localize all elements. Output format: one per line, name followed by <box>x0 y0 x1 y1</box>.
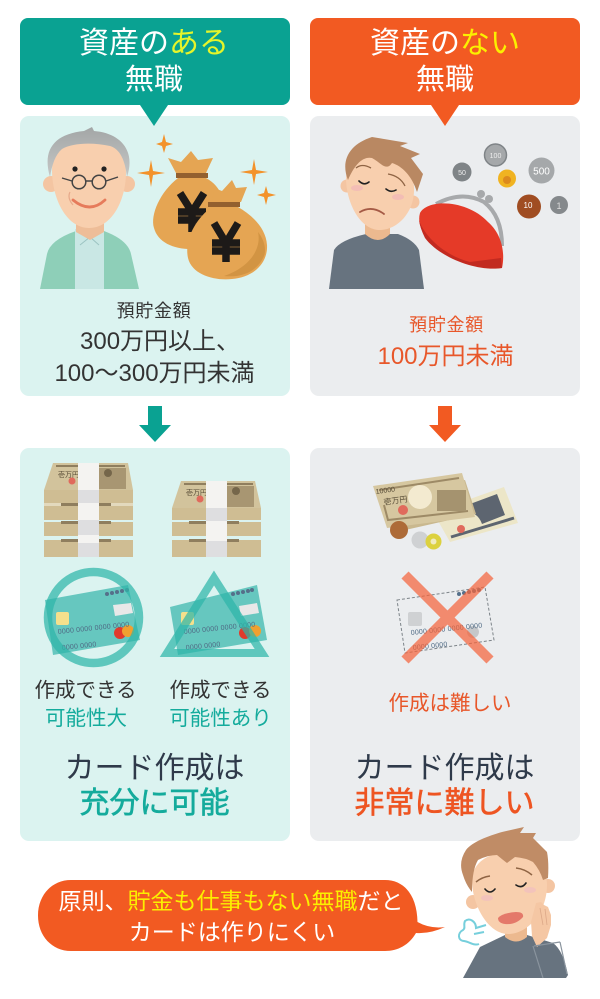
icon: crossed out dashed card: 0000 0000 <box>412 641 448 652</box>
text: savings amount, no assets <box>377 315 514 370</box>
text: card possibility labels: 可能性大 <box>45 707 127 730</box>
icon: crossed out dashed card <box>397 575 494 660</box>
icon: empty red coin purse and coins: 50 <box>458 170 466 177</box>
text: card verdict, possible: 充分に可能 <box>80 787 230 820</box>
text: savings amount, asset holder: 預貯金額 <box>117 301 191 321</box>
icon: tall cash stack: 壱万円 <box>58 470 79 479</box>
callout: conclusion speech bubble: 原則、貯金も仕事もない無職だと <box>58 888 404 914</box>
heading banner: asset holder <box>20 18 290 126</box>
text: savings amount, no assets: 100万円未満 <box>377 343 514 370</box>
icon: empty red coin purse and coins: 1 <box>556 201 562 211</box>
icon: yen money bags and sparkles <box>137 134 276 279</box>
icon: man with hand on cheek sighing <box>459 827 568 978</box>
text: card possibility labels <box>34 679 272 730</box>
heading banner: asset holder: 資産のある <box>79 27 229 60</box>
icon: credit card with circle mark <box>45 572 140 663</box>
icon: credit card with circle mark: 0000 0000 0000 0000 <box>57 622 130 636</box>
text: card verdict, possible: カード作成は <box>64 752 244 785</box>
text: card possibility labels: 作成できる <box>34 679 137 702</box>
icon: empty red coin purse and coins: 10 <box>524 201 533 210</box>
callout: conclusion speech bubble <box>38 880 445 951</box>
icon: empty red coin purse and coins <box>419 144 568 269</box>
icon: credit card with triangle mark <box>167 578 267 655</box>
icon: short cash stack <box>172 481 261 557</box>
callout: conclusion speech bubble: カードは作りにくい <box>129 919 335 945</box>
text: card verdict, difficult: 非常に難しい <box>354 787 534 820</box>
text: card verdict, difficult: カード作成は <box>354 752 534 785</box>
text: card difficult label: 作成は難しい <box>388 692 512 715</box>
text: savings amount, asset holder: 100〜300万円未満 <box>54 360 255 387</box>
panel: asset holder card result <box>20 448 290 841</box>
icon: banknotes and coins: 10000 <box>375 486 396 496</box>
text: savings amount, asset holder <box>54 301 255 387</box>
icon: empty red coin purse and coins: 500 <box>533 166 550 178</box>
heading banner: asset holder: 無職 <box>125 63 183 96</box>
text: card verdict, difficult <box>354 752 534 820</box>
text: card possibility labels: 作成できる <box>169 679 272 702</box>
icon: man sighing with eyes closed <box>329 137 424 289</box>
heading banner: no assets <box>310 18 580 126</box>
icon: crossed out dashed card: 0000 0000 0000 0000 <box>410 623 483 637</box>
panel: no asset card result <box>310 448 580 841</box>
arrow: orange down <box>429 406 461 442</box>
arrow: teal down <box>139 406 171 442</box>
text: savings amount, asset holder: 300万円以上、 <box>80 328 240 355</box>
icon: banknotes and coins <box>373 473 518 550</box>
icon: credit card with triangle mark: 0000 0000 <box>185 641 221 652</box>
icon: credit card with triangle mark: 0000 0000 0000 0000 <box>183 622 256 636</box>
icon: credit card with circle mark: 0000 0000 <box>61 641 97 652</box>
panel: no asset profile <box>310 116 580 396</box>
icon: tall cash stack <box>44 463 133 557</box>
heading banner: no assets: 資産のない <box>370 27 520 60</box>
text: card verdict, possible <box>64 752 244 820</box>
text: savings amount, no assets: 預貯金額 <box>409 315 484 335</box>
icon: empty red coin purse and coins: 100 <box>490 153 501 160</box>
icon: banknotes and coins: 壱万円 <box>383 494 408 507</box>
icon: smiling older man <box>40 127 139 289</box>
panel: asset holder profile <box>20 116 290 396</box>
text: card possibility labels: 可能性あり <box>169 707 272 730</box>
heading banner: no assets: 無職 <box>416 63 474 96</box>
icon: short cash stack: 壱万円 <box>186 488 207 497</box>
